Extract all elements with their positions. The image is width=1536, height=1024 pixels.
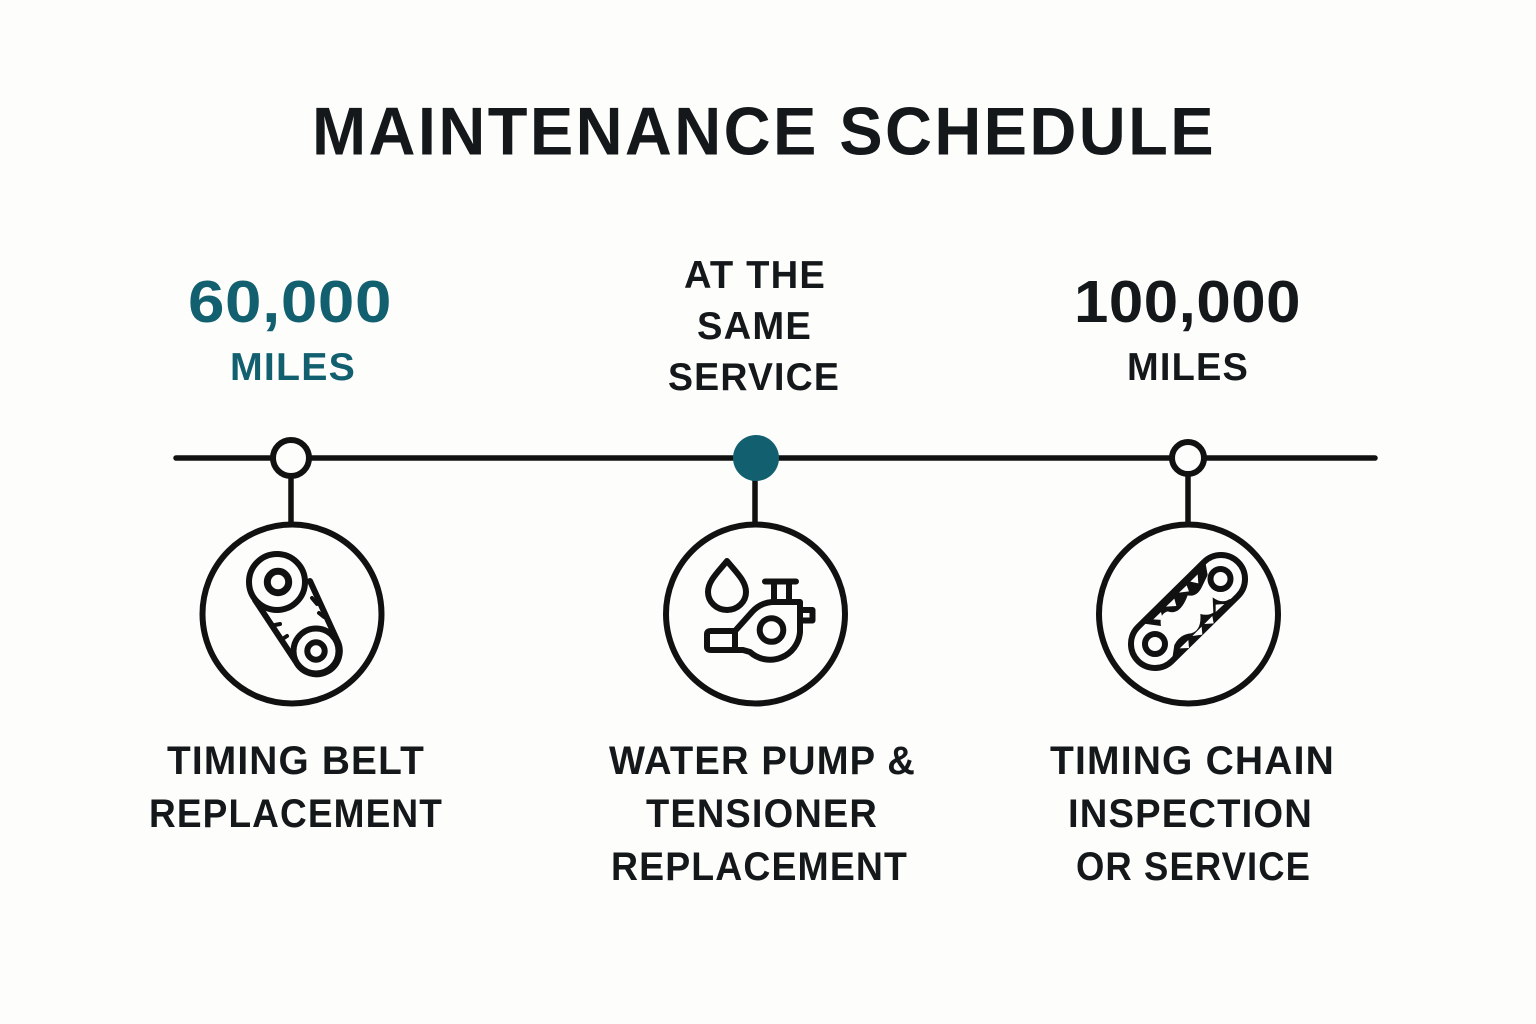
label: at the same service (668, 254, 840, 399)
icon: timing belt (202, 524, 382, 704)
marker: same service (733, 435, 779, 481)
caption: water pump and tensioner replacement (609, 739, 916, 889)
caption: timing belt replacement (149, 739, 443, 836)
label: 60,000 miles: 60,000 (188, 269, 392, 335)
marker: 60,000 miles (273, 440, 309, 476)
label: 100,000 miles: 100,000 (1074, 269, 1301, 335)
chain links (1142, 560, 1237, 658)
caption: timing chain inspection or service: INSPECTION (1068, 792, 1313, 836)
label: 60,000 miles: MILES (230, 346, 356, 389)
caption: water pump and tensioner replacement: TENSIONER (646, 792, 878, 836)
marker: 100,000 miles (1172, 442, 1204, 474)
caption: timing chain inspection or service: TIMING CHAIN (1050, 739, 1335, 783)
label: 100,000 miles: MILES (1127, 346, 1249, 389)
timeline (176, 435, 1375, 526)
icon: timing chain (1099, 524, 1278, 704)
caption: water pump and tensioner replacement: REPLACEMENT (611, 845, 908, 889)
title: MAINTENANCE SCHEDULE (312, 94, 1216, 170)
label: at the same service: SAME (697, 305, 812, 348)
caption: timing chain inspection or service: OR SERVICE (1076, 845, 1311, 889)
label: at the same service: AT THE (684, 254, 826, 297)
label: 60,000 miles (188, 269, 392, 389)
caption: timing belt replacement: REPLACEMENT (149, 792, 443, 836)
label: 100,000 miles (1074, 269, 1301, 389)
caption: water pump and tensioner replacement: WATER PUMP & (609, 739, 916, 783)
caption: timing chain inspection or service (1050, 739, 1335, 889)
caption: timing belt replacement: TIMING BELT (167, 739, 425, 783)
icon: water pump (666, 524, 845, 704)
label: at the same service: SERVICE (668, 356, 840, 399)
